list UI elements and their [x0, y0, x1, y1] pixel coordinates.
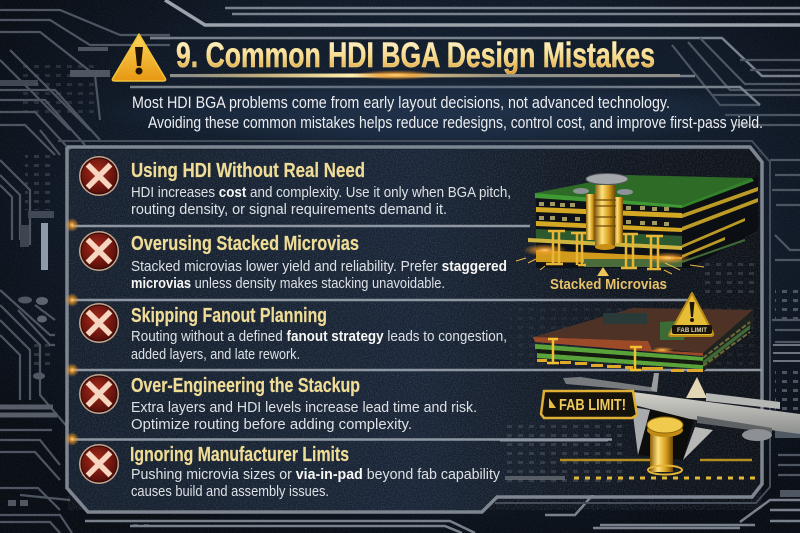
icon: red x — [79, 444, 119, 484]
body line 2: causes build and assembly issues. — [131, 484, 329, 500]
main rail — [633, 392, 800, 434]
heading: Over-Engineering the Stackup — [131, 375, 360, 397]
illustration: fanout PCB with warning — [533, 293, 753, 372]
small vias — [546, 231, 663, 269]
row dividers — [65, 218, 762, 446]
heading: Ignoring Manufacturer Limits — [130, 444, 349, 466]
badge: FAB LIMIT: FAB LIMIT! — [559, 397, 626, 414]
icon: red x — [79, 303, 119, 343]
body: HDI increases cost and complexity. Use it only when BGA pitch, — [131, 185, 511, 201]
upper rail — [563, 377, 657, 392]
body: Extra layers and HDI levels increase lead time and risk. — [131, 400, 477, 416]
heading: Using HDI Without Real Need — [131, 160, 365, 182]
gold via — [650, 430, 673, 472]
icon: red x — [79, 231, 119, 271]
item: overusing stacked microvias — [79, 231, 507, 292]
label: Stacked Microvias — [550, 277, 667, 293]
pads — [537, 359, 703, 372]
decorative rows of pads — [500, 260, 760, 515]
title: 9. Common HDI BGA Design Mistakes — [176, 36, 655, 75]
panel: mistakes frame — [58, 141, 770, 512]
icon: red x — [79, 156, 119, 196]
body line 2: routing density, or signal requirements demand it. — [131, 202, 447, 218]
body: Pushing microvia sizes or via-in-pad beyond fab capability — [131, 467, 501, 483]
board left face — [536, 198, 682, 268]
item: skipping fanout planning — [79, 303, 507, 363]
item: using HDI without real need — [79, 156, 511, 218]
body: Stacked microvias lower yield and reliability. Prefer staggered — [131, 259, 507, 275]
jaws — [632, 407, 650, 455]
illustration: stacked microvias PCB — [516, 174, 758, 293]
heading: Overusing Stacked Microvias — [131, 233, 359, 255]
body: Routing without a defined fanout strategy leads to congestion, — [131, 329, 507, 345]
item: over-engineering the stackup — [79, 374, 477, 433]
pointer — [597, 267, 609, 276]
header band — [90, 80, 790, 144]
body line 2: added layers, and late rework. — [131, 347, 300, 363]
illustration: caliper measuring via — [541, 373, 800, 478]
main via — [595, 185, 615, 247]
warning sign: FAB LIMIT — [677, 328, 707, 334]
dark backing — [638, 410, 695, 460]
warning sign — [669, 293, 713, 336]
title underline glow — [170, 70, 680, 80]
pad rows — [539, 202, 669, 226]
layers — [535, 344, 703, 361]
badge: FAB LIMIT — [541, 391, 637, 418]
glow — [523, 244, 567, 256]
heading: Skipping Fanout Planning — [131, 305, 327, 327]
side vias — [586, 194, 595, 240]
slider — [706, 393, 780, 409]
right side — [703, 311, 753, 372]
top surface — [535, 175, 752, 205]
I-beam vias — [547, 339, 642, 370]
item: ignoring manufacturer limits — [79, 444, 501, 500]
icon: warning triangle — [112, 34, 166, 81]
intro text: Most HDI BGA problems come from early layout decisions, not advanced technology. — [132, 94, 670, 112]
gold traces — [560, 459, 752, 461]
body line 2: Optimize routing before adding complexity. — [131, 417, 412, 433]
board right face — [682, 176, 758, 268]
intro text — [132, 94, 763, 132]
title block — [112, 34, 680, 81]
body line 2: microvias unless density makes stacking unavoidable. — [131, 276, 445, 292]
top surface — [533, 308, 753, 353]
icon: red x — [79, 374, 119, 414]
